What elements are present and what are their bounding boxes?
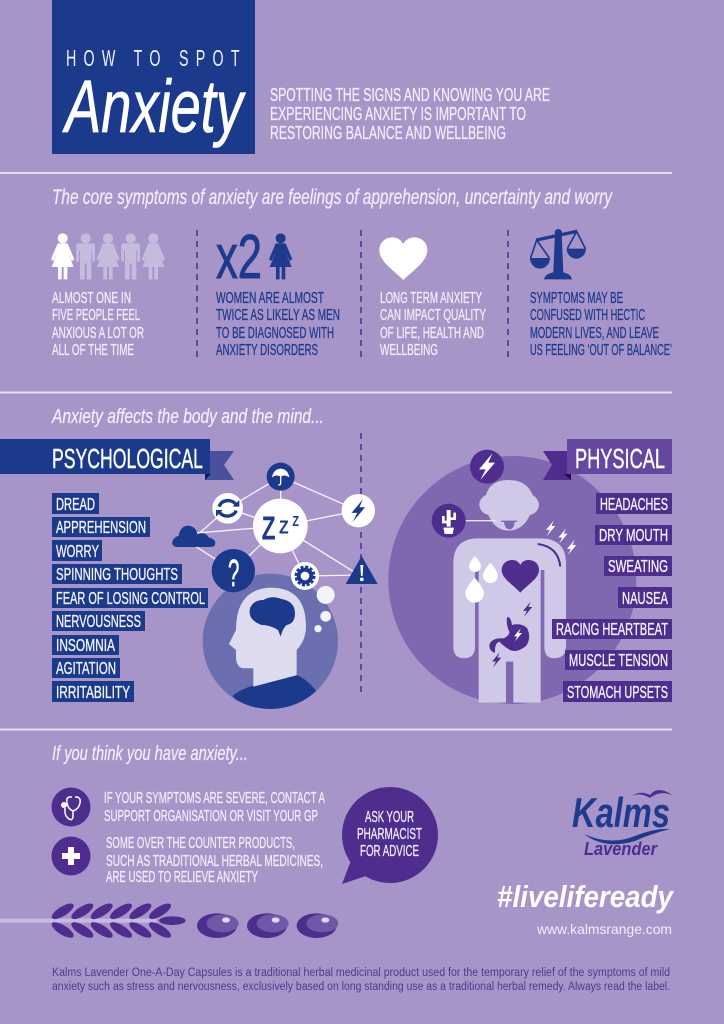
intro text: EXPERIENCING ANXIETY IS IMPORTANT TO [270, 104, 526, 124]
decoration: lavender sprig [0, 901, 186, 941]
hashtag: #livelifeready [497, 879, 675, 914]
icon: sleep zzz: Z [292, 514, 299, 530]
list: psychological symptoms [52, 493, 208, 702]
stat text: women twice as likely [216, 290, 340, 359]
list: physical symptoms: MUSCLE TENSION [569, 650, 668, 670]
advice text: severe symptoms [104, 790, 325, 825]
website: www.kalmsrange.com [536, 921, 672, 937]
heading: body and mind: Anxiety affects the body and the mind... [51, 406, 324, 428]
stat text: one in five: ANXIOUS A LOT OR [52, 325, 144, 342]
logo: Kalms Lavender: Kalms [572, 789, 670, 836]
stat text: long term anxiety: LONG TERM ANXIETY [380, 290, 482, 307]
icon: cloud [172, 526, 215, 547]
icon: question: ? [228, 552, 239, 595]
callout: ask your pharmacist: FOR ADVICE [360, 843, 419, 860]
icon: gear [291, 562, 319, 590]
list: psychological symptoms: FEAR OF LOSING CONTROL [56, 588, 205, 608]
stat text: women twice as likely: TO BE DIAGNOSED WITH [216, 325, 334, 342]
stat text: women twice as likely: WOMEN ARE ALMOST [216, 290, 324, 307]
icon: muscle tension [538, 521, 576, 567]
icon: tongue [501, 521, 517, 529]
list: physical symptoms [552, 493, 672, 702]
advice text: herbal medicines: ARE USED TO RELIEVE ANXIETY [106, 869, 258, 886]
banner: psychological: PSYCHOLOGICAL [52, 443, 203, 474]
icon: sleep zzz [253, 499, 308, 553]
heading: if you think: If you think you have anxiety... [52, 743, 248, 765]
intro text: RESTORING BALANCE AND WELLBEING [270, 123, 506, 143]
intro text [270, 85, 550, 143]
icon: racing heart [502, 560, 539, 593]
list: psychological symptoms: INSOMNIA [56, 635, 115, 655]
icon: lightning [342, 494, 375, 527]
illustration: head and worry network [172, 463, 378, 713]
list: physical symptoms: SWEATING [608, 556, 668, 576]
advice text: herbal medicines: SOME OVER THE COUNTER PRODUCTS, [106, 835, 295, 852]
stat text: one in five: ALL OF THE TIME [52, 342, 134, 359]
list: physical symptoms: DRY MOUTH [599, 525, 668, 545]
icon: umbrella [267, 463, 295, 491]
title block [52, 0, 255, 154]
stat text: long term anxiety: WELLBEING [380, 342, 438, 359]
icon: question [212, 549, 255, 595]
list: psychological symptoms: DREAD [56, 494, 95, 514]
banner: physical [543, 439, 672, 480]
advice text: herbal medicines [106, 835, 323, 886]
callout: ask your pharmacist: PHARMACIST [357, 826, 422, 843]
list: psychological symptoms: SPINNING THOUGHTS [56, 564, 178, 584]
stat text: out of balance [530, 290, 672, 359]
icon: cactus dry mouth [432, 504, 497, 538]
icon: x2 woman: x2 [216, 223, 262, 292]
list: physical symptoms: NAUSEA [622, 588, 668, 608]
banner: physical: PHYSICAL [575, 443, 665, 474]
stat text: long term anxiety: CAN IMPACT QUALITY [380, 307, 486, 324]
body [453, 480, 566, 703]
stat text: long term anxiety [380, 290, 486, 359]
decoration: lavender capsules [197, 913, 338, 938]
advice text: severe symptoms: IF YOUR SYMPTOMS ARE SEVERE, CONTACT A [104, 790, 325, 807]
callout: ask your pharmacist: ASK YOUR [365, 809, 414, 826]
disclaimer: Kalms Lavender One-A-Day Capsules is a traditional herbal medicinal product used for the temporary relief of the symptoms of mild [52, 967, 670, 979]
stat text: out of balance: SYMPTOMS MAY BE [530, 290, 623, 307]
title block: HOW TO SPOT [66, 47, 240, 72]
icon: sleep zzz: Z [279, 516, 289, 537]
icon: scales [530, 229, 586, 279]
icon: sync [212, 493, 243, 524]
advice text: severe symptoms: SUPPORT ORGANISATION OR VISIT YOUR GP [104, 808, 318, 825]
icon: sweat drops [465, 556, 498, 603]
icon: stethoscope [52, 788, 90, 826]
title block: Anxiety [62, 65, 246, 148]
list: physical symptoms: HEADACHES [600, 494, 668, 514]
callout: ask your pharmacist [342, 787, 438, 884]
icon: five people [51, 233, 165, 279]
icon: stomach [489, 602, 532, 668]
disclaimer: anxiety such as stress and nervousness, exclusively based on long standing use as a traditional herbal remedy. Always read the label. [52, 981, 670, 993]
stat text: long term anxiety: OF LIFE, HEALTH AND [380, 325, 484, 342]
advice text: herbal medicines: SUCH AS TRADITIONAL HERBAL MEDICINES, [106, 853, 323, 870]
icon: heart [379, 237, 427, 280]
disclaimer [52, 967, 670, 993]
stat text: one in five: ALMOST ONE IN [52, 290, 131, 307]
stat text: women twice as likely: TWICE AS LIKELY AS MEN [216, 307, 340, 324]
list: psychological symptoms: AGITATION [56, 658, 116, 678]
stat text: one in five: FIVE PEOPLE FEEL [52, 307, 140, 324]
stat text: out of balance: CONFUSED WITH HECTIC [530, 307, 645, 324]
icon: warning [346, 556, 378, 584]
list: psychological symptoms: IRRITABILITY [56, 682, 130, 702]
intro text: SPOTTING THE SIGNS AND KNOWING YOU ARE [270, 85, 550, 105]
list: psychological symptoms: NERVOUSNESS [56, 611, 141, 631]
head circle [203, 574, 338, 713]
icon: sleep zzz: Z [262, 510, 276, 547]
icon: plus [52, 836, 90, 876]
list: psychological symptoms: WORRY [56, 541, 99, 561]
logo: Kalms Lavender [572, 789, 672, 859]
list: psychological symptoms: APPREHENSION [56, 517, 146, 537]
logo: Kalms Lavender: Lavender [584, 839, 658, 859]
icon: headache bolt [470, 450, 504, 484]
stat text: women twice as likely: ANXIETY DISORDERS [216, 342, 318, 359]
illustration: physical body [388, 450, 636, 704]
banner: psychological [0, 439, 234, 480]
stat text: one in five [52, 290, 144, 359]
